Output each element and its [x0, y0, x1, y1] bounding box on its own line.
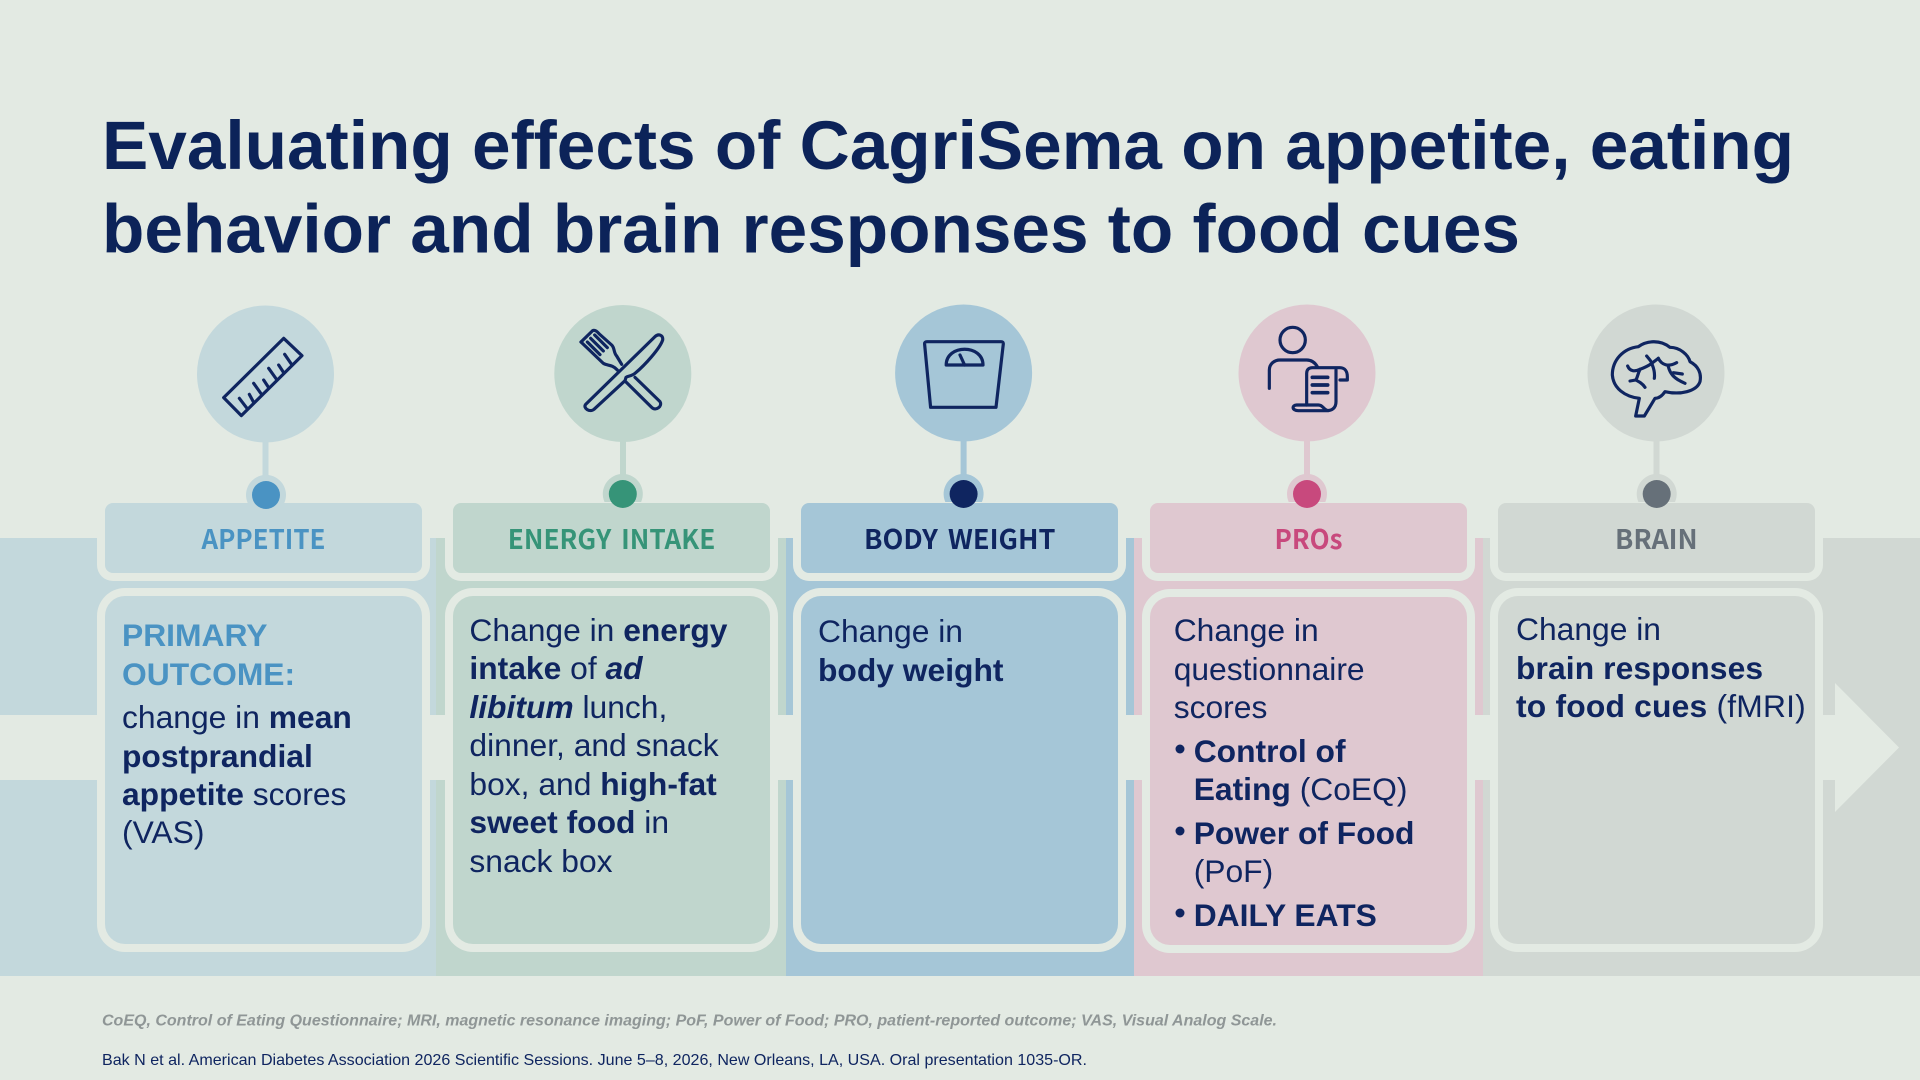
- header: PROs: [1142, 503, 1475, 581]
- header: appetite: [97, 503, 430, 581]
- header: brain: [1490, 503, 1823, 581]
- header: appetite: APPETITE: [201, 518, 326, 557]
- body panel: appetite: change in mean: [122, 699, 352, 735]
- body panel: PROs: (PoF): [1194, 853, 1273, 889]
- connector dot: appetite: [246, 475, 286, 509]
- body panel: appetite: [97, 588, 430, 952]
- body panel: brain: [1490, 588, 1823, 952]
- background timeline bands with arrow: [0, 538, 1920, 976]
- body panel: energy intake: Change in energy: [469, 612, 728, 648]
- connector dot: energy intake: [603, 474, 643, 508]
- body panel: brain: to food cues (fMRI): [1516, 688, 1806, 724]
- body panel: body weight: Change in: [818, 613, 963, 649]
- body panel: energy intake: intake of ad: [469, 650, 643, 686]
- column: PROs: [1142, 304, 1475, 953]
- body panel: energy intake: dinner, and snack: [469, 727, 719, 763]
- icon circle: energy intake fork and knife: [554, 305, 691, 480]
- body panel: appetite: (VAS): [122, 814, 204, 850]
- body panel: PROs: Eating (CoEQ): [1194, 771, 1407, 807]
- body panel: PROs: scores: [1174, 689, 1267, 725]
- title: Evaluating effects of CagriSema on appetite, eating: [102, 107, 1794, 184]
- body panel: PROs: Change in: [1174, 612, 1319, 648]
- body panel: PROs: questionnaire: [1174, 651, 1365, 687]
- connector dot: brain: [1637, 474, 1677, 508]
- header: brain: BRAIN: [1615, 518, 1698, 557]
- icon circle: appetite ruler: [197, 306, 334, 480]
- footnote: reference: Bak N et al. American Diabetes Association 2026 Scientific Sessions. June 5–8, 2026, New Orleans, LA, USA. Oral presentation 1035-OR.: [102, 1052, 1087, 1069]
- footnote: abbreviations: CoEQ, Control of Eating Questionnaire; MRI, magnetic resonance imaging; PoF, Power of Food; PRO, patient-reported outcome; VAS, Visual Analog Scale.: [102, 1012, 1277, 1030]
- body panel: energy intake: [445, 588, 778, 952]
- connector dot: PROs: [1287, 474, 1327, 508]
- body panel: appetite: postprandial: [122, 738, 313, 774]
- body panel: energy intake: snack box: [469, 843, 613, 879]
- column: energy intake: [445, 305, 778, 952]
- body panel: PROs: Power of Food: [1194, 815, 1414, 851]
- column: brain: [1490, 304, 1823, 952]
- body panel: appetite: OUTCOME:: [122, 656, 295, 692]
- body panel: appetite: appetite scores: [122, 776, 346, 812]
- title: [102, 107, 1794, 268]
- column: body weight: [793, 304, 1126, 952]
- body panel: PROs: DAILY EATS: [1194, 897, 1377, 933]
- body panel: energy intake: sweet food in: [469, 804, 669, 840]
- header: energy intake: ENERGY INTAKE: [508, 518, 715, 557]
- body panel: appetite: PRIMARY: [122, 617, 267, 653]
- body panel: brain: Change in: [1516, 611, 1661, 647]
- body panel: body weight: [793, 588, 1126, 952]
- header: body weight: [793, 503, 1126, 581]
- column: appetite: [97, 306, 430, 952]
- body panel: energy intake: box, and high-fat: [469, 766, 717, 802]
- header: PROs: PROs: [1274, 518, 1342, 557]
- body panel: brain: brain responses: [1516, 650, 1763, 686]
- body panel: body weight: body weight: [818, 652, 1004, 688]
- body panel: energy intake: libitum lunch,: [469, 689, 667, 725]
- header: body weight: BODY WEIGHT: [864, 518, 1056, 557]
- title: behavior and brain responses to food cues: [102, 190, 1520, 268]
- header: energy intake: [445, 503, 778, 581]
- icon circle: brain: [1588, 304, 1724, 480]
- body panel: PROs: [1142, 589, 1475, 953]
- body panel: PROs: Control of: [1194, 733, 1346, 769]
- icon circle: weighing scale: [895, 304, 1032, 480]
- icon circle: person with questionnaire: [1238, 304, 1376, 480]
- connector dot: body weight: [944, 474, 984, 508]
